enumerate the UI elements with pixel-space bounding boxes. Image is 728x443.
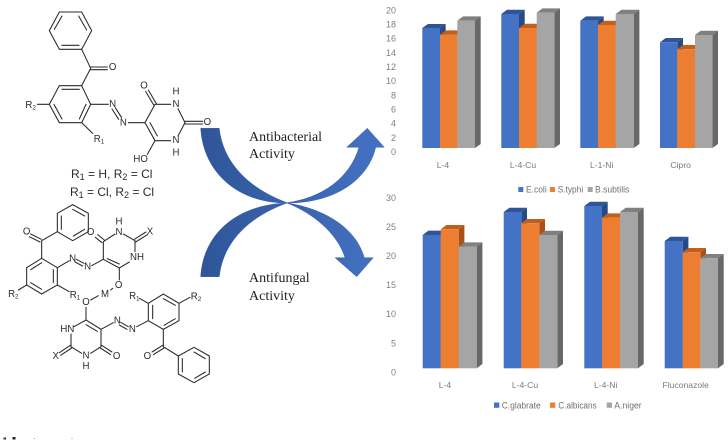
chemical structure: metal complex: N	[129, 324, 136, 335]
chemical structure: metal complex: 1	[136, 295, 140, 302]
y axis labels: 15	[386, 280, 396, 290]
chemical structure: metal complex: H	[83, 361, 90, 372]
chemical structure: metal complex	[8, 205, 209, 383]
chemical structure: metal complex: O	[87, 227, 95, 238]
category labels	[439, 380, 709, 390]
substituent legend: 2	[122, 172, 127, 182]
chemical structure: metal complex: O	[23, 227, 31, 238]
y axis labels: 20	[386, 5, 396, 15]
category labels: L-4	[439, 380, 451, 390]
chemical structure: metal complex: 2	[15, 293, 19, 300]
y axis labels: 2	[391, 133, 396, 143]
chemical structure: metal complex: M	[101, 289, 109, 300]
substituent legend	[70, 167, 154, 200]
bar group: Fluconazole	[665, 237, 724, 368]
chemical structure: free ligand: O	[204, 117, 212, 128]
legend: B.subtilis	[595, 184, 630, 194]
legend: A.niger	[614, 400, 642, 410]
top bar chart: antibacterial	[386, 5, 718, 194]
legend: S.typhi	[558, 184, 583, 194]
legend: C.glabrate	[502, 400, 541, 410]
chemical structure: metal complex: X	[147, 227, 154, 238]
chemical structure: free ligand: 2	[32, 104, 36, 111]
chemical structure: free ligand: N	[120, 118, 127, 129]
substituent legend: = Cl, R	[84, 185, 124, 199]
category labels: L-4	[437, 160, 449, 170]
bottom bar chart: antifungal	[386, 193, 724, 410]
chemical structure: free ligand: R	[25, 100, 32, 111]
chemical structure: free ligand: HO	[133, 154, 148, 165]
chemical structure: metal complex: O	[82, 297, 90, 308]
bar group: L-1-Ni	[580, 10, 639, 148]
substituent legend: 2	[124, 190, 129, 200]
chemical structure: metal complex: 2	[198, 296, 202, 303]
category labels	[437, 160, 691, 170]
chemical structure: metal complex: HN	[60, 324, 74, 335]
substituent legend: = H, R	[85, 167, 123, 181]
bar group: L-4-Ni	[584, 202, 644, 368]
chemical structure: metal complex: N	[69, 254, 76, 265]
y axis labels: 14	[386, 48, 396, 58]
arrow: to antifungal activity	[201, 203, 373, 277]
label: antifungal activity: Activity	[249, 289, 295, 304]
chemical structure: free ligand: H	[173, 87, 180, 98]
chemical structure: metal complex: R	[70, 290, 77, 301]
chemical structure: free ligand	[25, 12, 212, 165]
chemical structure: metal complex: O	[115, 280, 123, 291]
chemical structure: metal complex: O	[113, 351, 121, 362]
category labels: Cipro	[670, 160, 691, 170]
legend: E.coli	[526, 184, 547, 194]
category labels: Fluconazole	[663, 380, 709, 390]
chemical structure: free ligand: N	[109, 99, 116, 110]
y axis labels	[386, 5, 396, 157]
bar group: L-4-Cu	[501, 8, 560, 148]
chemical structure: metal complex: H	[116, 217, 123, 228]
chemical structure: metal complex: N	[84, 262, 91, 273]
chemical structure: metal complex: O	[144, 351, 152, 362]
chemical structure: free ligand: O	[109, 62, 117, 73]
y axis labels: 12	[386, 62, 396, 72]
bar group: Cipro	[660, 31, 718, 148]
substituent legend: R	[70, 185, 79, 199]
legend	[518, 184, 630, 194]
category labels: L-4-Cu	[510, 160, 536, 170]
label: antibacterial activity: Activity	[249, 147, 295, 162]
label: antibacterial activity: Antibacterial	[249, 130, 322, 145]
y axis labels: 0	[391, 147, 396, 157]
chemical structure: free ligand: 1	[101, 138, 105, 145]
chemical structure: free ligand: O	[140, 81, 148, 92]
y axis labels: 18	[386, 20, 396, 30]
label: antifungal activity: Antifungal	[249, 271, 310, 286]
y axis labels: 20	[386, 251, 396, 261]
category labels: L-1-Ni	[590, 160, 613, 170]
substituent legend: = Cl	[129, 185, 154, 199]
chemical structure: metal complex: NH	[130, 252, 144, 263]
legend	[494, 400, 642, 410]
substituent legend: 1	[80, 172, 85, 182]
chemical structure: metal complex: R	[8, 289, 15, 300]
chemical structure: free ligand: R	[94, 134, 101, 145]
category labels: L-4-Ni	[594, 380, 617, 390]
y axis labels: 16	[386, 34, 396, 44]
chemical structure: free ligand: H	[173, 148, 180, 159]
y axis labels: 25	[386, 222, 396, 232]
category labels: L-4-Cu	[512, 380, 538, 390]
chemical structure: free ligand: N	[173, 135, 180, 146]
y axis labels: 10	[386, 309, 396, 319]
y axis labels: 30	[386, 193, 396, 203]
y axis labels	[386, 193, 396, 378]
y axis labels: 6	[391, 104, 396, 114]
y axis labels: 5	[391, 338, 396, 348]
chemical structure: metal complex: N	[116, 227, 123, 238]
chemical structure: metal complex: N	[114, 316, 121, 327]
y axis labels: 8	[391, 90, 396, 100]
substituent legend: = Cl	[127, 167, 152, 181]
y axis labels: 0	[391, 368, 396, 378]
chemical structure: metal complex: 1	[77, 294, 81, 301]
y axis labels: 4	[391, 119, 396, 129]
chemical structure: metal complex: R	[191, 292, 198, 303]
y axis labels: 10	[386, 76, 396, 86]
chemical structure: metal complex: R	[129, 291, 136, 302]
substituent legend: R	[71, 167, 80, 181]
bar group: L-4	[423, 225, 482, 368]
substituent legend: 1	[79, 190, 84, 200]
bar group: L-4-Cu	[504, 208, 563, 368]
bar group: L-4	[422, 16, 481, 148]
legend: C.albicans	[558, 400, 597, 410]
arrow: to antibacterial activity	[201, 128, 384, 203]
chemical structure: free ligand: N	[173, 99, 180, 110]
chemical structure: metal complex: X	[52, 351, 59, 362]
chemical structure: metal complex: N	[83, 351, 90, 362]
